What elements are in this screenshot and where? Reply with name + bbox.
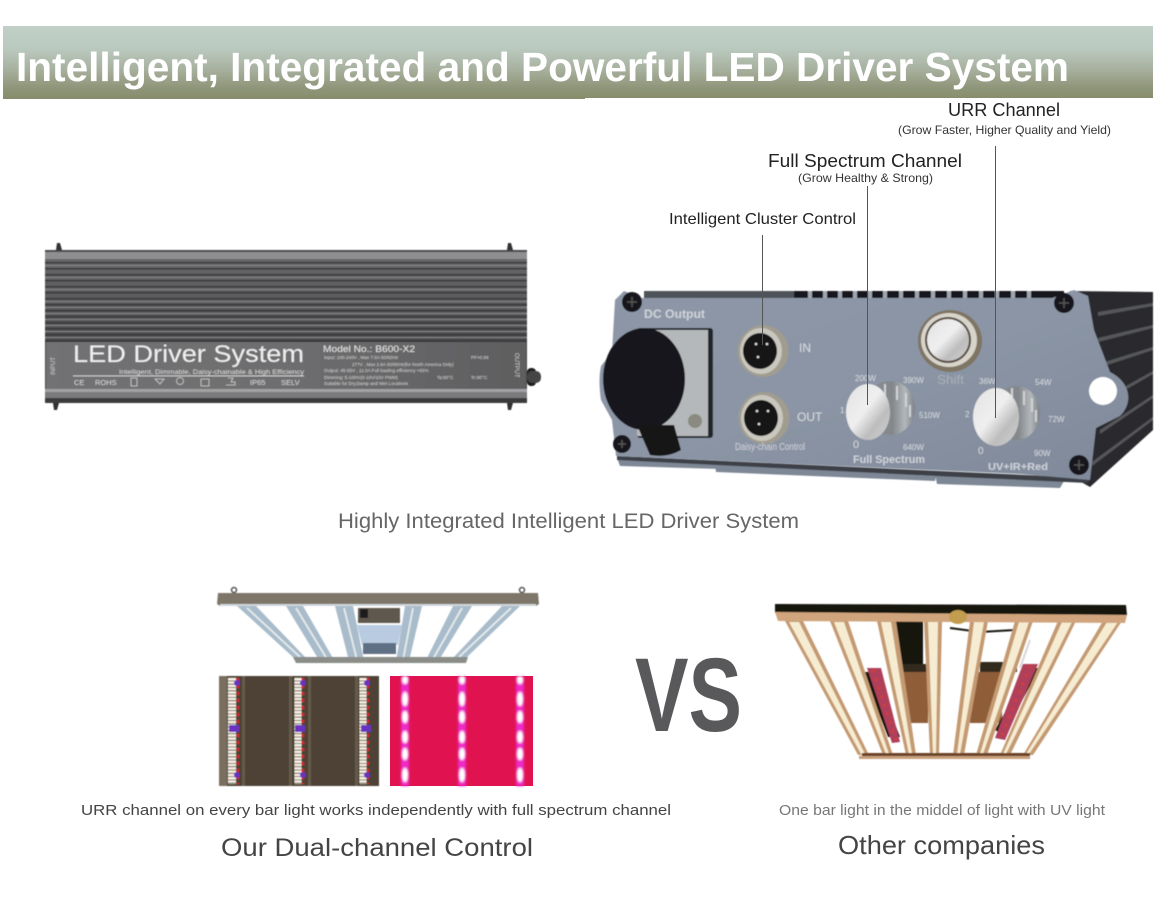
VS label: VS [635, 637, 742, 754]
certification row: SELV [281, 378, 300, 387]
certification row [74, 378, 300, 387]
feet [617, 456, 1090, 488]
URR bar photo [390, 676, 533, 786]
certification row: CE [74, 378, 84, 387]
caption: driver system: Highly Integrated Intelligent LED Driver System [338, 510, 799, 533]
mounting hole [1089, 377, 1117, 405]
centre clamp [949, 610, 967, 624]
cert icons [131, 378, 235, 386]
centre dark block [895, 620, 923, 668]
IN connector [738, 325, 788, 377]
panel: driver front panel photo [600, 290, 1153, 488]
output label: OUTPUT [513, 353, 519, 378]
caption: competitor note: One bar light in the middel of light with UV light [779, 802, 1106, 819]
full spectrum scale: 390W [903, 376, 924, 385]
heading: other companies: Other companies [838, 830, 1045, 860]
shift label: Shift [937, 372, 964, 387]
OUT connector [738, 392, 790, 444]
arms [237, 606, 520, 661]
panel: LED driver unit photo: PF>0.98 [471, 355, 489, 360]
URR scale: 0 [978, 446, 984, 457]
label plate [46, 342, 526, 389]
panel: LED driver unit photo: Suitable for Dry,Damp and Wet Locations [324, 381, 409, 386]
URR scale: 54W [1035, 378, 1052, 387]
URR scale: 90W [1034, 449, 1051, 458]
input label: INPUT [51, 357, 57, 375]
panel: LED driver unit photo: Input: 100-240V , Max 7.0A 50/60Hz [324, 355, 399, 360]
arm LEDs [247, 608, 511, 660]
DC output label: DC Output [644, 307, 705, 321]
URR scale: 36W [979, 377, 996, 386]
full spectrum knob [846, 381, 915, 440]
full spectrum label: Full Spectrum [853, 454, 925, 466]
callout: full spectrum channel: (Grow Healthy & Strong) [798, 171, 933, 185]
driver subtitle: Intelligent, Dimmable, Daisy-chainable & High Efficiency [119, 369, 305, 376]
brown panels [903, 672, 1002, 723]
callout: URR channel: (Grow Faster, Higher Quality and Yield) [898, 123, 1111, 137]
tan arms [785, 621, 1122, 755]
caption: URR channel note: URR channel on every bar light works independently with full spectrum channel [81, 802, 671, 819]
bottom bar [859, 753, 1030, 759]
URR scale: 2 [965, 410, 970, 419]
panel: competitor light fixture [775, 604, 1127, 759]
front plate [600, 290, 1128, 480]
mounting tabs [53, 243, 513, 410]
full spectrum scale: 1 [840, 406, 845, 415]
top bar [217, 593, 539, 606]
full spectrum bar photo [219, 676, 379, 786]
heading: our control: Our Dual-channel Control [221, 834, 533, 862]
panel: LED driver unit photo [45, 243, 541, 410]
shift button [918, 310, 982, 372]
full spectrum scale: 0 [853, 439, 859, 451]
callout: full spectrum channel [768, 151, 962, 185]
title: Intelligent, Integrated and Powerful LED Driver System [16, 44, 1069, 90]
full spectrum scale: 640W [903, 443, 924, 452]
model specs: Model No.: B600-X2 [323, 344, 415, 354]
callout: URR channel [898, 100, 1111, 137]
full spectrum scale [840, 374, 940, 452]
wires [950, 628, 1030, 668]
output connector [527, 368, 541, 386]
callout: cluster control: Intelligent Cluster Control [669, 211, 856, 228]
full spectrum scale: 200W [855, 374, 876, 383]
UV bar left [863, 668, 900, 743]
DC output socket [603, 328, 713, 456]
certification row: ROHS [95, 378, 117, 387]
panel: LED driver unit photo: Dimming: 5-100%(0-10V/10V PWM) [324, 375, 398, 380]
IN label: IN [799, 341, 811, 355]
daisy-chain label: Daisy-chain Control [735, 442, 805, 453]
panel: our light fixture [217, 588, 539, 663]
callout: URR channel: URR Channel [948, 100, 1060, 120]
URR panel label: UV+IR+Red [988, 461, 1048, 473]
certification row: IP65 [250, 378, 265, 387]
panel: LED driver unit photo: 277V , Max 2.8A 50/60Hz(for North America Only) [352, 362, 454, 367]
leader lines [762, 146, 996, 418]
OUT label: OUT [797, 410, 823, 424]
driver box [357, 608, 402, 654]
driver heading: LED Driver System [73, 341, 304, 368]
screws [613, 292, 1089, 475]
hanging rings [232, 588, 524, 592]
URR knob [973, 386, 1040, 446]
UV bar right [995, 664, 1040, 740]
title banner [3, 26, 1153, 99]
full spectrum scale: 510W [919, 411, 940, 420]
panel: LED driver unit photo: Ta:50°C [437, 375, 454, 380]
URR scale: 72W [1048, 415, 1065, 424]
heat sink body [644, 291, 1153, 487]
arm LEDs [789, 622, 1118, 754]
URR scale [965, 377, 1065, 458]
panel: LED driver unit photo: Tc:90°C [471, 375, 488, 380]
callout: full spectrum channel: Full Spectrum Channel [768, 151, 962, 171]
panel: LED driver unit photo: Output: 45-55V , 11.0A Full loading efficiency >93% [324, 368, 429, 373]
top bar [775, 604, 1127, 615]
lower bar [293, 657, 468, 663]
